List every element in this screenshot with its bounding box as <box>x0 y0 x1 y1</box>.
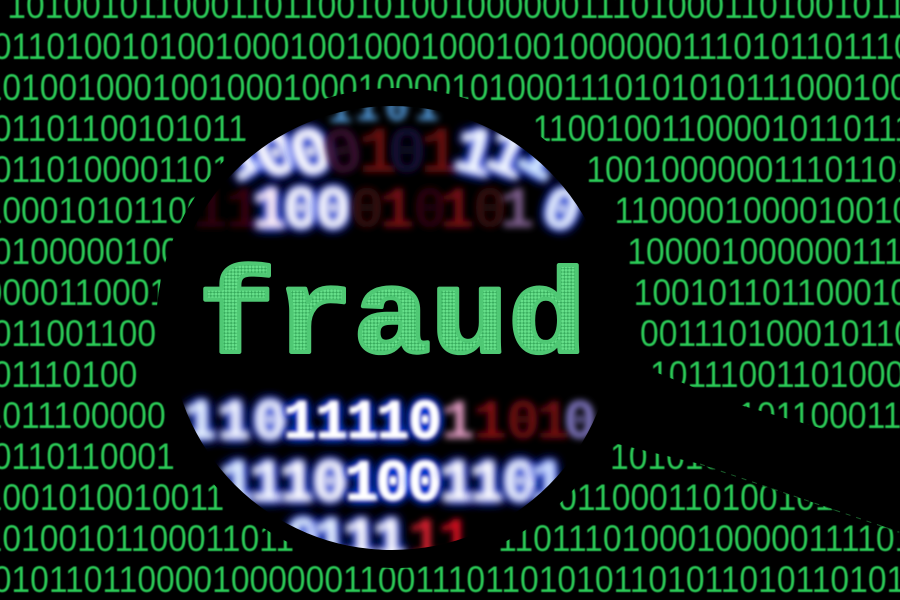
lens contents <box>183 88 597 573</box>
blurred lower digit row one: 1 <box>346 391 380 455</box>
blurred lower digit row two: 1 <box>220 453 254 518</box>
blurred lower digit row one: 1 <box>315 391 349 455</box>
blurred upper digit row: 1 <box>205 116 281 200</box>
blurred lower digit row three: 1 <box>438 509 472 573</box>
blurred second digit row: 0 <box>316 180 350 245</box>
blurred upper digit row: 1 <box>474 114 539 198</box>
blurred lower digit row one <box>183 391 597 455</box>
blurred second digit row: 0 <box>534 177 587 249</box>
blurred lower digit row one: 1 <box>283 391 317 455</box>
blurred top sliver of digits: 0 <box>385 88 409 133</box>
blurred second digit row: 1 <box>380 180 414 245</box>
blurred lower digit row one: 0 <box>408 391 442 455</box>
blurred lower digit row two: 1 <box>250 453 284 518</box>
blurred lower digit row one: 1 <box>536 391 570 455</box>
blurred lower digit row two: 1 <box>280 453 314 518</box>
blurred lower digit row one: 1 <box>376 391 410 455</box>
blurred upper digit row: 1 <box>420 117 460 192</box>
blurred lower digit row one: 0 <box>506 391 540 455</box>
blurred lower digit row two: 0 <box>503 453 537 518</box>
blurred lower digit row three <box>281 508 466 550</box>
blurred lower digit row three: 1 <box>313 509 347 573</box>
blurred second digit row: 0 <box>413 180 447 245</box>
blurred top sliver of digits: 1 <box>328 90 352 135</box>
blurred second digit row: 0 <box>350 180 384 245</box>
binary code rows: 01101100101011 <box>0 109 247 149</box>
blurred upper digit row: 0 <box>316 114 371 196</box>
magnifying glass handle <box>560 350 900 532</box>
blurred lower digit row one: 1 <box>441 391 475 455</box>
blurred lower digit row two: 1 <box>345 453 379 518</box>
blurred lower digit row one: 1 <box>217 391 251 455</box>
blurred second digit row: 1 <box>253 180 287 245</box>
binary code rows: 0110001101001011 <box>558 478 850 518</box>
word: fraud: fraud <box>198 253 586 389</box>
blurred lower digit row one: 1 <box>473 391 507 455</box>
blurred top sliver of digits: 1 <box>415 88 439 133</box>
blurred lower digit row two <box>220 453 565 518</box>
binary code rows: 10111001101000 <box>650 355 900 395</box>
blurred second digit row: 1 <box>440 180 474 245</box>
blurred lower digit row three: 0 <box>286 509 320 573</box>
blurred second digit row <box>195 176 586 240</box>
blurred second digit row: 0 <box>284 180 318 245</box>
magnifying glass rim <box>156 88 636 568</box>
blurred lower digit row one: 0 <box>253 391 287 455</box>
blurred lower digit row one: 0 <box>563 391 597 455</box>
binary code rows: 01011011000010000001100111011010101101011010110101 <box>0 560 900 600</box>
blurred upper digit row: 1 <box>358 117 398 192</box>
blurred upper digit row: 0 <box>243 114 313 199</box>
blurred second digit row: 1 <box>500 180 534 245</box>
blurred second digit row: 0 <box>473 180 507 245</box>
blurred lower digit row two: 0 <box>313 453 347 518</box>
blurred lower digit row two: 0 <box>376 453 410 518</box>
binary code rows: 10101011110 <box>610 437 808 477</box>
blurred top sliver of digits: 1 <box>355 88 379 133</box>
blurred top sliver of digits <box>326 106 442 128</box>
blurred upper digit row <box>228 119 557 190</box>
blurred lower digit row three: 1 <box>343 509 377 573</box>
blurred second digit row: 1 <box>193 180 227 245</box>
blurred lower digit row two: 1 <box>470 453 504 518</box>
blurred lower digit row two: 0 <box>408 453 442 518</box>
blurred lower digit row three: 1 <box>408 509 442 573</box>
blurred upper digit row: 0 <box>387 117 427 192</box>
blurred lower digit row two: 1 <box>440 453 474 518</box>
blurred lower digit row two: 1 <box>531 453 565 518</box>
blurred lower digit row three: 1 <box>373 509 407 573</box>
blurred upper digit row: 1 <box>503 114 575 199</box>
blurred second digit row: 1 <box>226 180 260 245</box>
blurred upper digit row: 0 <box>281 114 343 198</box>
blurred upper digit row: 1 <box>446 114 503 196</box>
blurred lower digit row one: 1 <box>183 391 217 455</box>
